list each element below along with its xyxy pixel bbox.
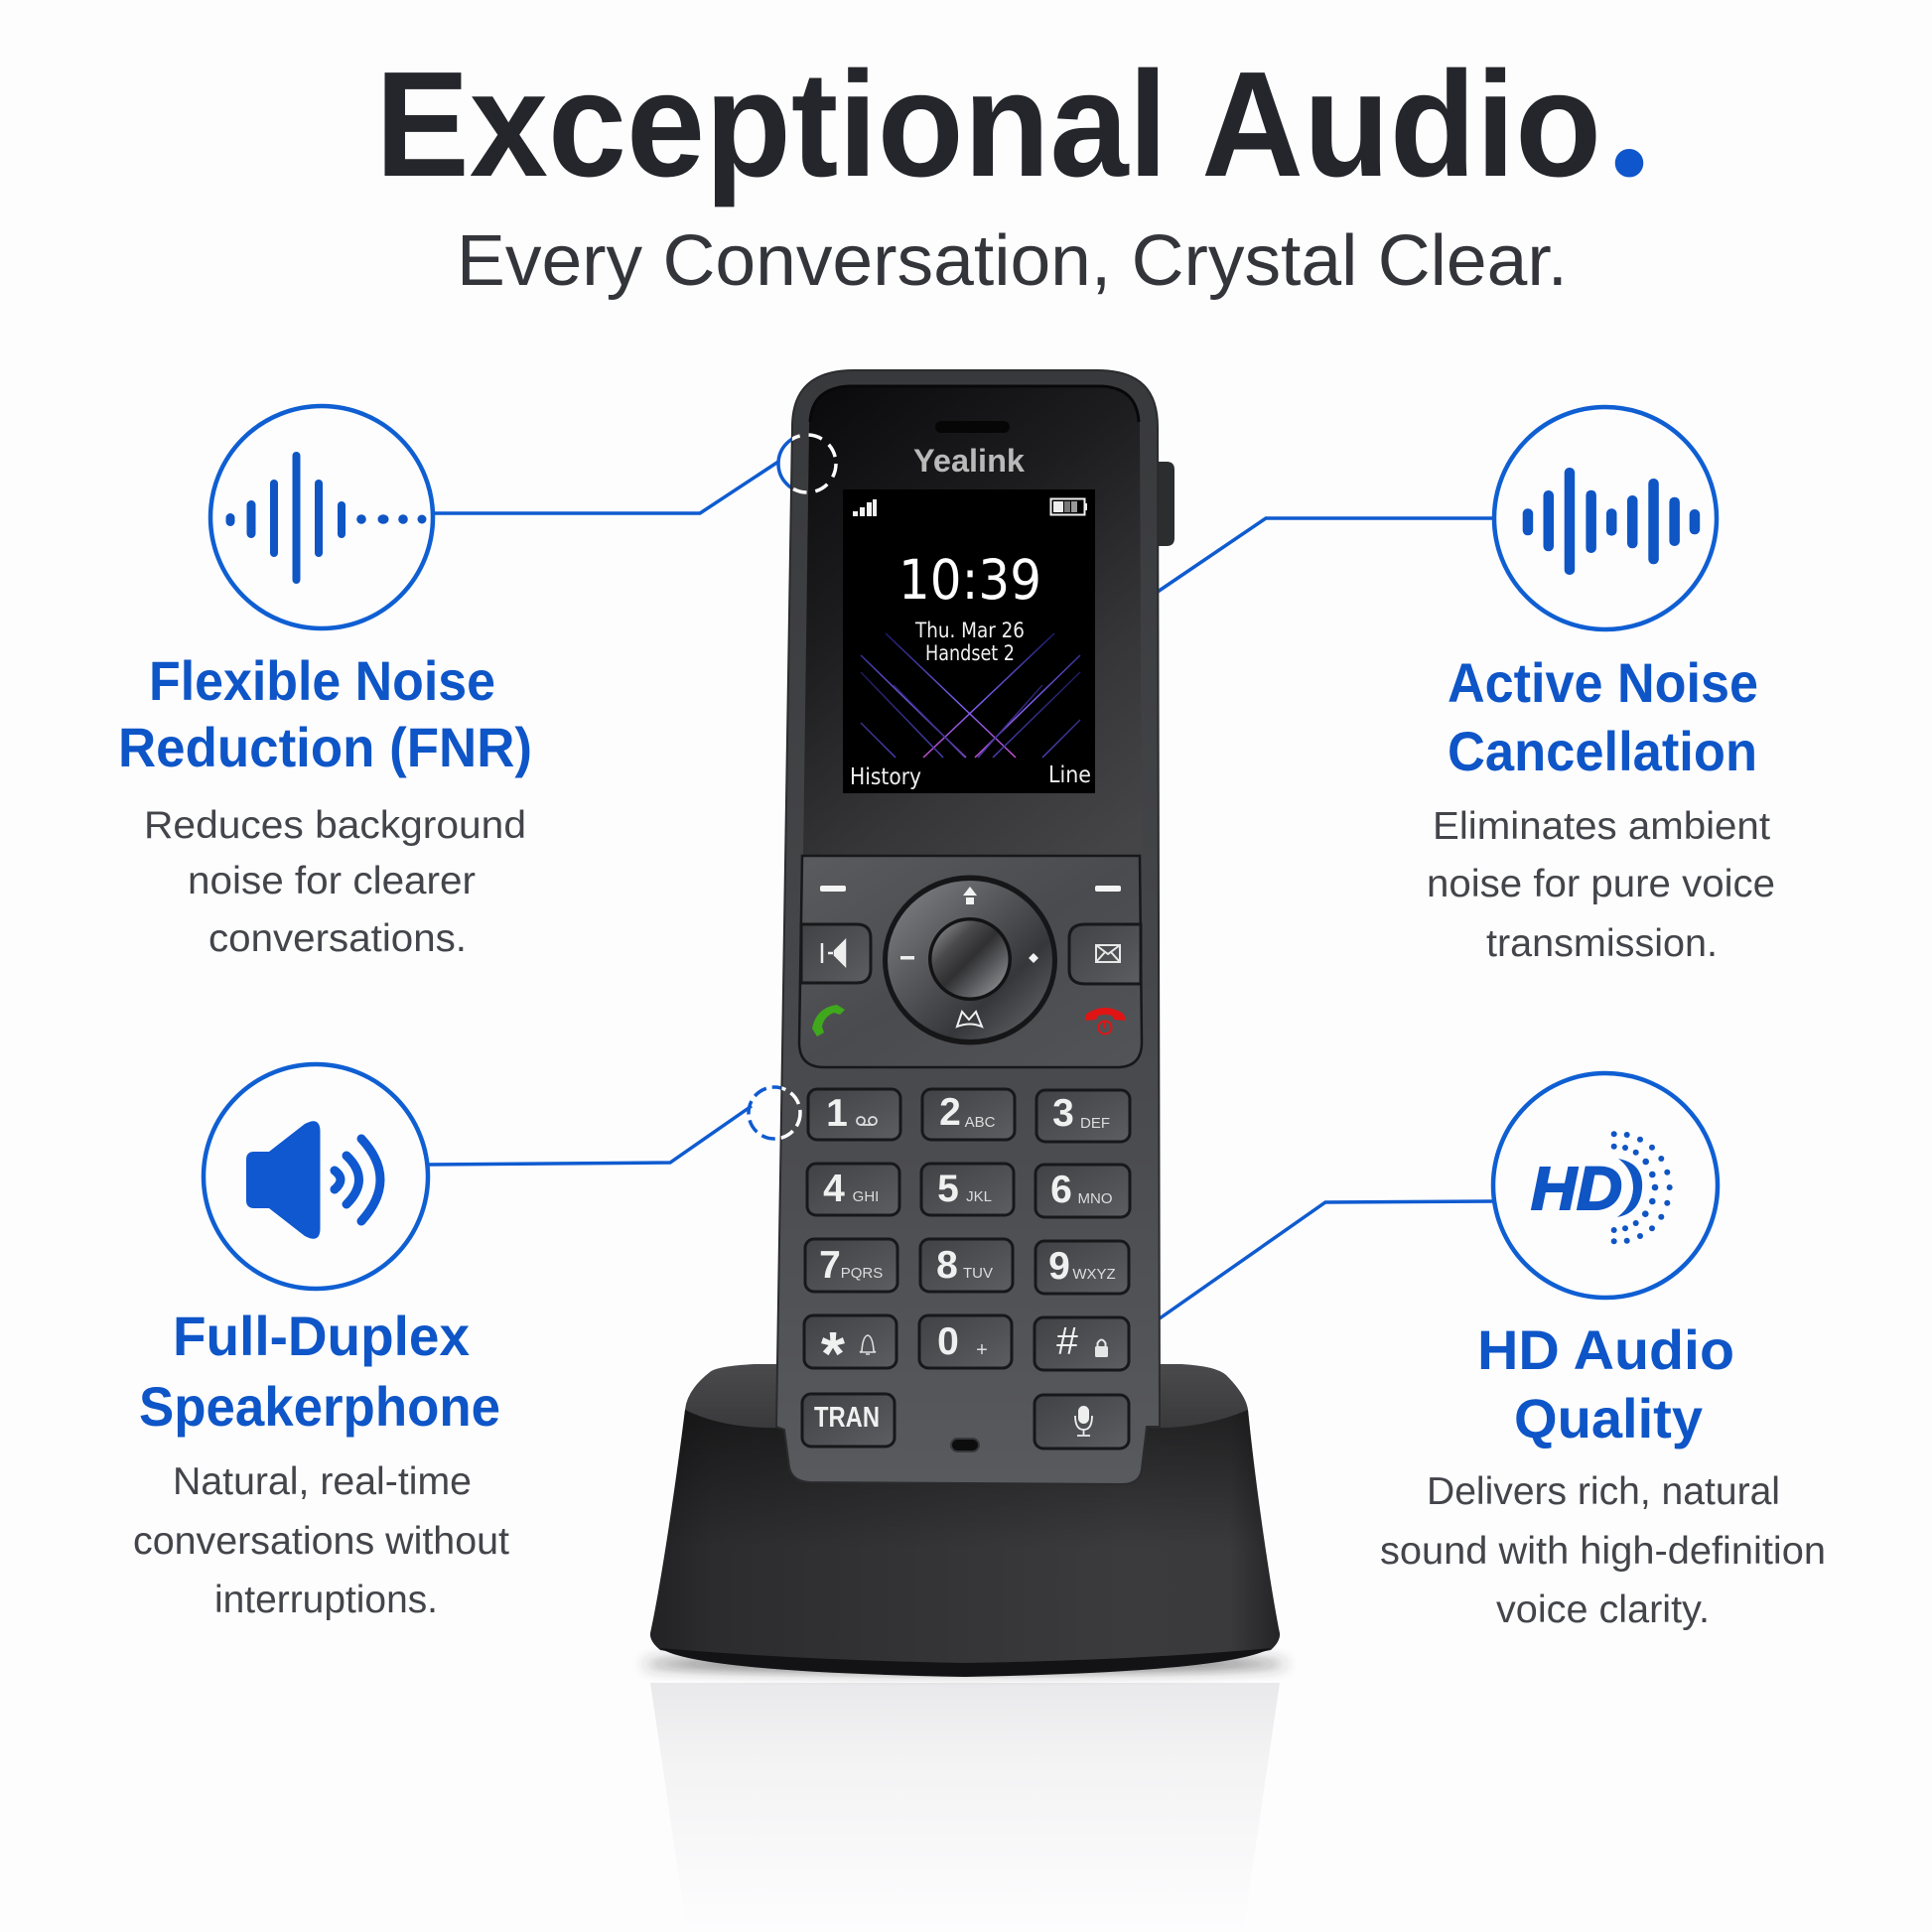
lcd time: 10:39	[898, 548, 1041, 612]
text: full-duplex description: interruptions.	[214, 1579, 438, 1621]
key 3: 3	[1052, 1092, 1074, 1135]
heading: active noise cancellation: Active Noise	[1448, 651, 1758, 714]
key 5: JKL	[966, 1188, 992, 1205]
key 9: 9	[1048, 1245, 1070, 1288]
heading: hd audio quality: Quality	[1514, 1387, 1703, 1449]
key 7: 7	[819, 1244, 841, 1287]
lcd handset name: Handset 2	[925, 641, 1015, 665]
connector: active noise cancellation	[1158, 518, 1493, 592]
heading: hd audio quality	[1477, 1318, 1734, 1449]
logo: Yealink	[913, 443, 1025, 479]
callout: white dashed marker on body top	[792, 433, 838, 494]
heading: active noise cancellation: Cancellation	[1448, 720, 1757, 782]
heading: hd audio quality: HD Audio	[1477, 1318, 1734, 1381]
icon: hd audio: HD	[1531, 1155, 1622, 1222]
red end call icon	[1085, 1008, 1125, 1035]
signal bars	[853, 499, 877, 516]
heading: full-duplex speakerphone: Full-Duplex	[173, 1305, 470, 1367]
battery	[1050, 498, 1087, 514]
lcd soft label right: Line	[1048, 762, 1091, 788]
callout: white dashed marker on keypad	[780, 1086, 802, 1140]
key 2: ABC	[965, 1114, 996, 1131]
microphone slot	[951, 1439, 979, 1451]
icon: speaker	[204, 1064, 428, 1289]
heading: active noise cancellation	[1448, 651, 1758, 782]
key 8	[920, 1239, 1013, 1292]
key 9	[1035, 1241, 1129, 1294]
nav left dash	[900, 956, 914, 959]
text: full-duplex description: conversations without	[133, 1520, 509, 1563]
key mic	[1035, 1395, 1129, 1449]
key 2	[922, 1089, 1015, 1140]
phone body	[776, 370, 1160, 1484]
text: anc description: noise for pure voice	[1427, 863, 1775, 905]
green call icon	[812, 1005, 845, 1036]
message key	[1069, 924, 1141, 984]
keypad	[802, 1089, 1130, 1449]
reflection under cradle	[650, 1683, 1280, 1932]
key 0: 0	[937, 1320, 959, 1363]
lcd date: Thu. Mar 26	[914, 619, 1025, 642]
key star: *	[821, 1320, 846, 1389]
title: .	[1607, 20, 1651, 213]
text: hd audio description: Delivers rich, natural	[1427, 1470, 1780, 1513]
text: fnr description: Reduces background	[144, 804, 526, 847]
heading: flexible noise reduction: Reduction (FNR)	[118, 716, 532, 778]
navigation ring	[883, 876, 1057, 1044]
heading: full-duplex speakerphone	[139, 1305, 500, 1438]
subtitle: Every Conversation, Crystal Clear.	[457, 221, 1568, 301]
heading: flexible noise reduction	[118, 649, 532, 778]
key 0: +	[976, 1339, 988, 1361]
text: full-duplex description: Natural, real-time	[173, 1460, 472, 1503]
key hash: #	[1056, 1320, 1078, 1363]
connector: hd audio	[1160, 1201, 1493, 1318]
bezel top edge	[810, 386, 1139, 422]
key 6: 6	[1050, 1169, 1072, 1211]
key 7	[805, 1239, 897, 1292]
key 4: 4	[823, 1168, 845, 1210]
nav up arrow	[963, 887, 977, 904]
key 5: 5	[937, 1168, 959, 1210]
text: fnr description: noise for clearer	[188, 860, 476, 902]
key 4	[807, 1164, 899, 1215]
screen bezel	[803, 385, 1142, 856]
key 0	[919, 1315, 1012, 1368]
text: hd audio description: voice clarity.	[1496, 1588, 1710, 1631]
key 8: TUV	[963, 1265, 993, 1282]
mute key	[801, 924, 871, 983]
icon: waveform with dots	[210, 406, 433, 628]
text: fnr description: conversations.	[208, 917, 467, 960]
text: anc description	[1427, 805, 1775, 965]
key 9: WXYZ	[1072, 1266, 1116, 1283]
key 1	[808, 1089, 900, 1140]
lcd screen	[843, 489, 1095, 793]
connector: flexible noise reduction	[435, 435, 836, 513]
soft key right	[1095, 886, 1121, 892]
icon: hd audio	[1493, 1073, 1718, 1298]
key 7: PQRS	[841, 1265, 883, 1282]
navigation panel	[799, 856, 1142, 1067]
key star	[804, 1315, 897, 1389]
key 6: MNO	[1078, 1190, 1112, 1207]
soft key left	[820, 886, 846, 892]
earpiece	[935, 421, 1010, 433]
nav right diamond	[1029, 953, 1038, 963]
lcd soft label left: History	[850, 764, 921, 790]
text: hd audio description	[1380, 1470, 1826, 1631]
phone handset	[776, 370, 1160, 1484]
key 5	[921, 1164, 1014, 1215]
key tran: TRAN	[814, 1402, 880, 1434]
key 3: DEF	[1080, 1115, 1110, 1132]
text: anc description: transmission.	[1486, 922, 1718, 965]
key 4: GHI	[853, 1188, 879, 1205]
text: hd audio description: sound with high-definition	[1380, 1530, 1826, 1573]
title: Exceptional Audio	[375, 40, 1601, 207]
key 3	[1036, 1090, 1130, 1142]
key 2: 2	[939, 1091, 961, 1134]
lcd wallpaper lines	[861, 633, 1080, 758]
icon: active noise waveform	[1494, 407, 1717, 629]
connector: full-duplex speakerphone	[428, 1087, 800, 1165]
heading: flexible noise reduction: Flexible Noise	[149, 649, 495, 712]
heading: full-duplex speakerphone: Speakerphone	[139, 1375, 500, 1438]
key 6	[1035, 1165, 1130, 1217]
key 1: 1	[826, 1092, 848, 1135]
text: full-duplex description	[133, 1460, 509, 1621]
key 8: 8	[936, 1244, 958, 1287]
text: anc description: Eliminates ambient	[1433, 805, 1770, 848]
key hash	[1035, 1317, 1129, 1370]
text: fnr description	[144, 804, 526, 960]
key tran	[802, 1394, 895, 1447]
side button	[1157, 462, 1174, 546]
nav directory icon	[957, 1012, 982, 1027]
cradle base	[642, 1364, 1288, 1677]
